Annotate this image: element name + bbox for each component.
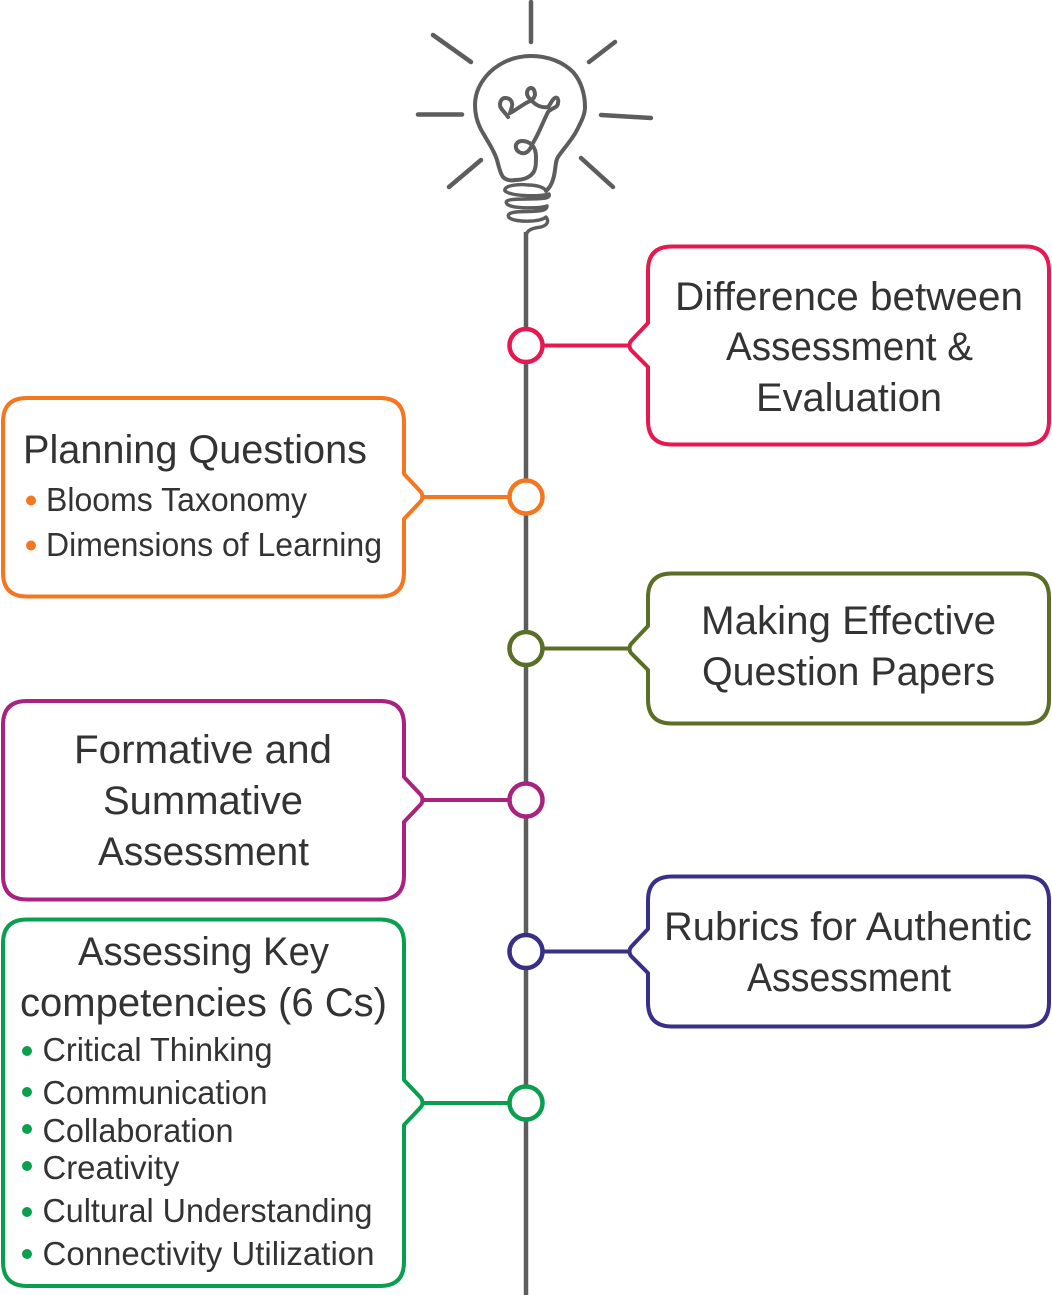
callout text: rubrics for authentic assessment xyxy=(664,905,1032,1000)
list: six competencies: Critical Thinking xyxy=(42,1031,272,1068)
heading: planning questions: Planning Questions xyxy=(23,428,367,472)
heading: assessing key competencies xyxy=(20,930,387,1025)
panel: difference between assessment and evaluation xyxy=(510,246,1049,444)
callout text: difference between assessment and evaluation xyxy=(675,275,1023,420)
panel: making effective question papers xyxy=(510,574,1049,724)
heading: assessing key competencies: Assessing Key xyxy=(78,930,329,974)
list: six competencies: Creativity xyxy=(42,1149,180,1186)
panel: assessing key competencies xyxy=(3,920,542,1286)
callout box: olive xyxy=(630,574,1049,724)
callout text: formative and summative assessment: Summative xyxy=(103,779,303,823)
callout box: navy xyxy=(630,876,1049,1026)
timeline spine xyxy=(524,232,528,1295)
connector: green xyxy=(422,1086,542,1120)
list: planning questions topics xyxy=(26,481,382,563)
panel: formative and summative assessment xyxy=(3,701,542,900)
list: six competencies: Collaboration xyxy=(42,1112,234,1149)
callout text: rubrics for authentic assessment: Assessment xyxy=(747,956,951,1000)
callout box: red xyxy=(630,246,1049,444)
callout text: formative and summative assessment xyxy=(74,728,332,874)
connector: magenta xyxy=(422,784,542,816)
list: six competencies: Cultural Understanding xyxy=(42,1192,372,1229)
connector: navy xyxy=(510,935,630,968)
icon: light bulb xyxy=(418,2,651,250)
panel: rubrics for authentic assessment xyxy=(510,876,1049,1026)
list: six competencies: Communication xyxy=(42,1074,268,1111)
callout text: making effective question papers: Making Effective xyxy=(701,599,996,643)
connector: olive xyxy=(510,632,630,665)
callout box: magenta xyxy=(3,701,422,900)
callout text: difference between assessment and evaluation: Difference between xyxy=(675,275,1023,319)
list: planning questions topics: Blooms Taxonomy xyxy=(46,481,307,518)
heading: assessing key competencies: competencies (6 Cs) xyxy=(20,981,387,1025)
list: planning questions topics: Dimensions of Learning xyxy=(46,526,382,563)
panel: planning questions xyxy=(3,398,542,596)
callout text: difference between assessment and evaluation: Assessment & xyxy=(726,325,973,369)
list: six competencies xyxy=(22,1031,374,1272)
connector: orange xyxy=(422,480,542,514)
callout text: making effective question papers xyxy=(701,599,996,694)
callout text: making effective question papers: Question Papers xyxy=(702,650,995,694)
callout box: green xyxy=(3,920,422,1286)
callout text: rubrics for authentic assessment: Rubrics for Authentic xyxy=(664,905,1032,949)
callout text: formative and summative assessment: Formative and xyxy=(74,728,332,772)
callout text: formative and summative assessment: Assessment xyxy=(98,830,309,874)
callout text: difference between assessment and evaluation: Evaluation xyxy=(756,376,942,420)
list: six competencies: Connectivity Utilization xyxy=(42,1235,374,1272)
callout box: orange xyxy=(3,398,422,596)
connector: red xyxy=(510,329,630,362)
